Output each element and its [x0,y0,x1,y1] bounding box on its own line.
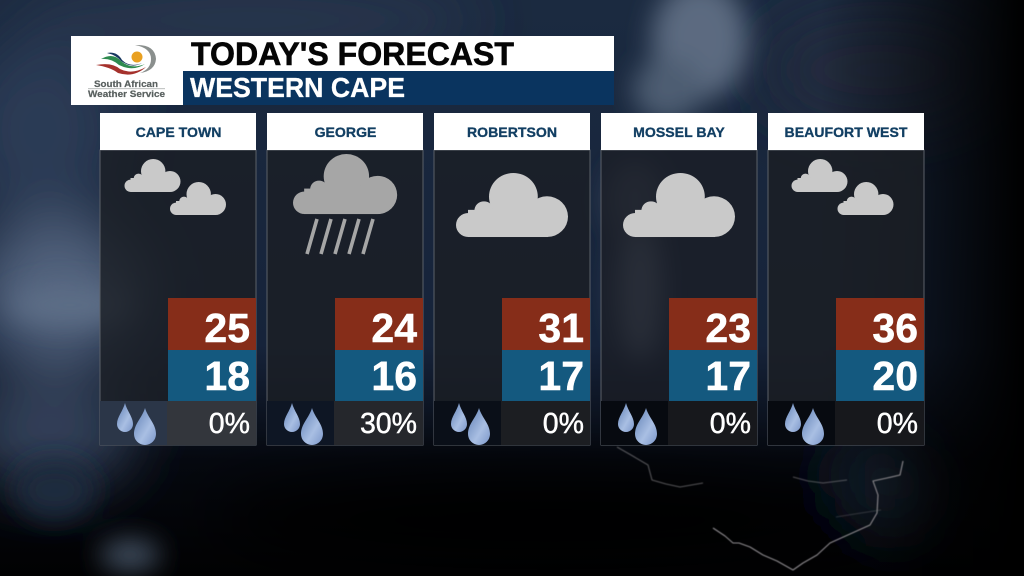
rain chance [167,401,256,445]
title banner [71,36,614,105]
icon: rain drops [434,401,501,445]
panel: Cape Town [100,113,256,445]
high temperature: 23 [705,305,751,351]
subtitle heading: WESTERN CAPE [190,72,405,103]
low temperature [669,350,757,401]
high temperature [836,298,924,351]
city header [768,113,924,150]
city header: CAPE TOWN [136,124,221,140]
city header: BEAUFORT WEST [785,124,908,140]
high temperature: 31 [538,305,584,351]
rain chance: 0% [710,408,751,440]
rain chance: 0% [543,408,584,440]
panel: Beaufort West [768,113,924,445]
low temperature: 17 [705,353,751,399]
high temperature: 24 [371,305,417,351]
icon: rain cloud [293,154,397,254]
icon: rain drops [768,401,835,445]
city header [100,113,256,150]
rain chance: 0% [209,408,250,440]
low temperature: 16 [371,353,417,399]
rain chance: 30% [360,408,417,440]
low temperature: 18 [204,353,250,399]
logo: South African Weather Service: Weather Service [88,89,165,99]
city header: MOSSEL BAY [633,124,725,140]
city header: ROBERTSON [467,124,557,140]
rain chance [501,401,590,445]
icon: rain drops [267,401,334,445]
low temperature [168,350,256,401]
icon: rain drops [601,401,668,445]
city header [601,113,757,150]
subtitle bar [183,71,614,105]
icon: partly cloudy [792,159,894,215]
icon: cloud [623,173,735,237]
city header [434,113,590,150]
high temperature: 36 [872,305,918,351]
low temperature: 20 [872,353,918,399]
city header: GEORGE [315,124,376,140]
high temperature: 25 [204,305,250,351]
high temperature [335,298,423,351]
logo: South African Weather Service: South African [94,79,158,89]
rain chance [668,401,757,445]
panel: Mossel Bay [601,113,757,445]
low temperature: 17 [538,353,584,399]
logo: South African Weather Service [88,45,165,99]
title heading: TODAY'S FORECAST [191,36,514,72]
high temperature [669,298,757,351]
lightning bolts [617,447,903,570]
icon: rain drops [100,401,167,445]
rain chance [835,401,924,445]
low temperature [836,350,924,401]
panel: George [267,113,423,445]
low temperature [502,350,590,401]
icon: cloud [456,173,568,237]
icon: partly cloudy [124,159,226,215]
low temperature [335,350,423,401]
rain chance [334,401,423,445]
high temperature [168,298,256,351]
rain chance: 0% [877,408,918,440]
high temperature [502,298,590,351]
city header [267,113,423,150]
panel: Robertson [434,113,590,445]
